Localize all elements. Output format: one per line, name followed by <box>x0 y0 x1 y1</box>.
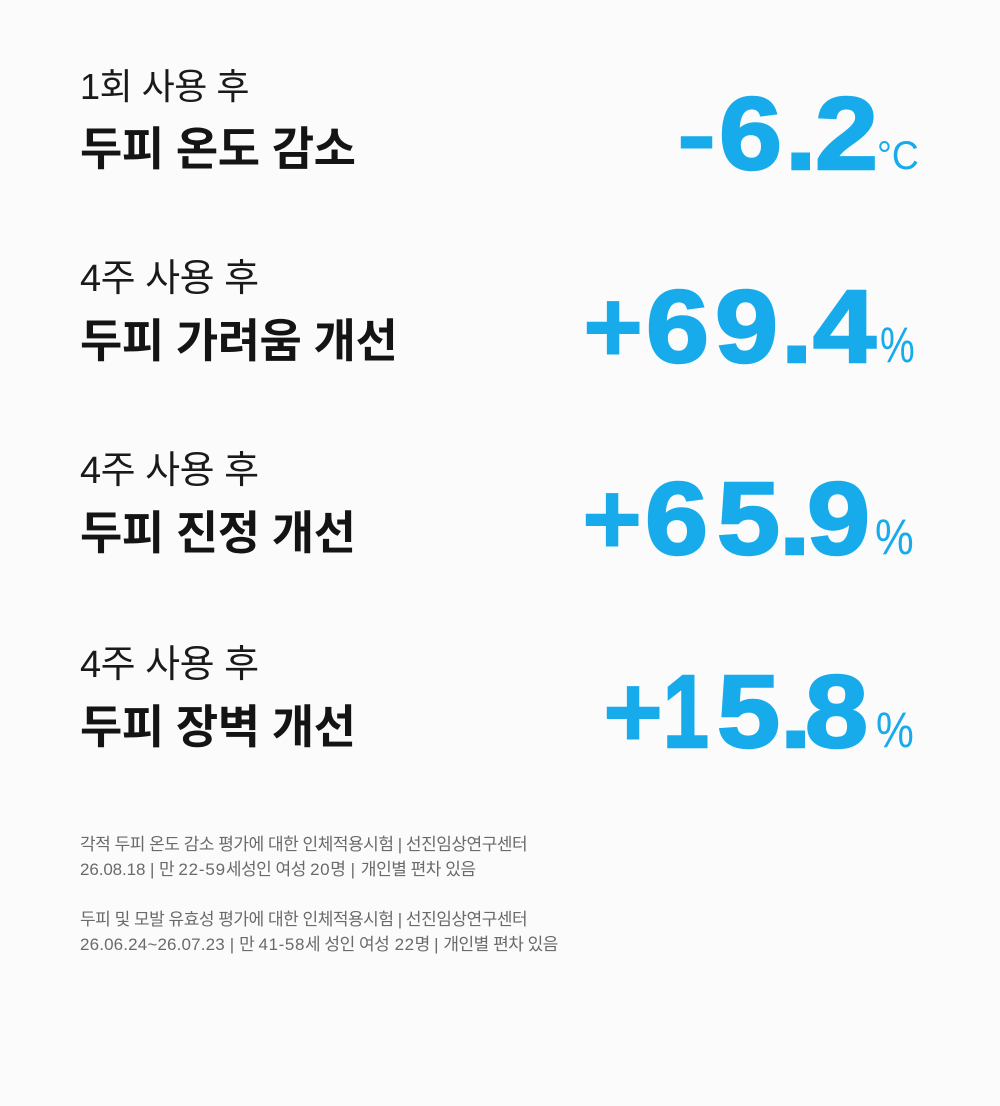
value: +15.8: + <box>603 654 663 769</box>
value: -6.2: 6 <box>719 76 782 191</box>
value: +15.8: . <box>780 654 811 769</box>
panel: scalp itching <box>80 258 397 367</box>
value: +65.9: 6 <box>645 461 708 576</box>
value: +69.4 <box>583 269 877 384</box>
value: -6.2 <box>676 76 878 191</box>
value: -6.2: . <box>785 76 816 191</box>
value: +65.9: + <box>582 461 642 576</box>
footnote: second clinical study: 두피 및 모발 유효성 평가에 대한 인체적용시험 | 선진임상연구센터 <box>80 910 527 929</box>
value: +15.8: 8 <box>805 654 868 769</box>
heading: scalp temperature reduction: 두피 온도 감소 <box>80 123 355 175</box>
heading: scalp barrier improvement: 두피 장벽 개선 <box>80 701 355 753</box>
value: +15.8: 5 <box>717 654 780 769</box>
label: after four weeks: 4주 사용 후 <box>80 644 259 686</box>
value: -6.2: 2 <box>815 76 878 191</box>
value: +69.4: . <box>781 269 812 384</box>
unit: celsius: °C <box>877 134 919 178</box>
value: +65.9 <box>582 461 870 576</box>
value: +15.8 <box>603 654 868 769</box>
footnote: first clinical study <box>80 835 527 879</box>
value: +65.9: 9 <box>807 461 870 576</box>
panel: scalp barrier <box>80 644 355 753</box>
unit: percent: % <box>880 317 915 373</box>
footnote: first clinical study: 26.08.18 | 만 22-59세성인 여성 20명 | 개인별 편차 있음 <box>80 860 476 879</box>
panel: scalp temperature <box>80 66 355 175</box>
value: -6.2: - <box>676 76 717 191</box>
value: +69.4: 9 <box>715 269 778 384</box>
footnote: second clinical study: 26.06.24~26.07.23 | 만 41-58세 성인 여성 22명 | 개인별 편차 있음 <box>80 935 558 954</box>
label: after one use: 1회 사용 후 <box>80 66 249 107</box>
label: after four weeks: 4주 사용 후 <box>80 450 259 492</box>
value: +69.4: 6 <box>646 269 709 384</box>
heading: scalp soothing improvement: 두피 진정 개선 <box>80 507 355 559</box>
panel: scalp soothing <box>80 450 355 559</box>
value: +69.4: 4 <box>813 269 876 384</box>
heading: scalp itching improvement: 두피 가려움 개선 <box>80 315 397 367</box>
value: +65.9: 5 <box>717 461 780 576</box>
footnote: second clinical study <box>80 910 558 954</box>
unit: percent: % <box>876 702 914 758</box>
value: +65.9: . <box>779 461 810 576</box>
label: after four weeks: 4주 사용 후 <box>80 258 259 300</box>
unit: percent: % <box>875 509 914 565</box>
value: +15.8: 1 <box>663 654 709 769</box>
value: +69.4: + <box>583 269 643 384</box>
footnote: first clinical study: 각적 두피 온도 감소 평가에 대한 인체적용시험 | 선진임상연구센터 <box>80 835 527 854</box>
